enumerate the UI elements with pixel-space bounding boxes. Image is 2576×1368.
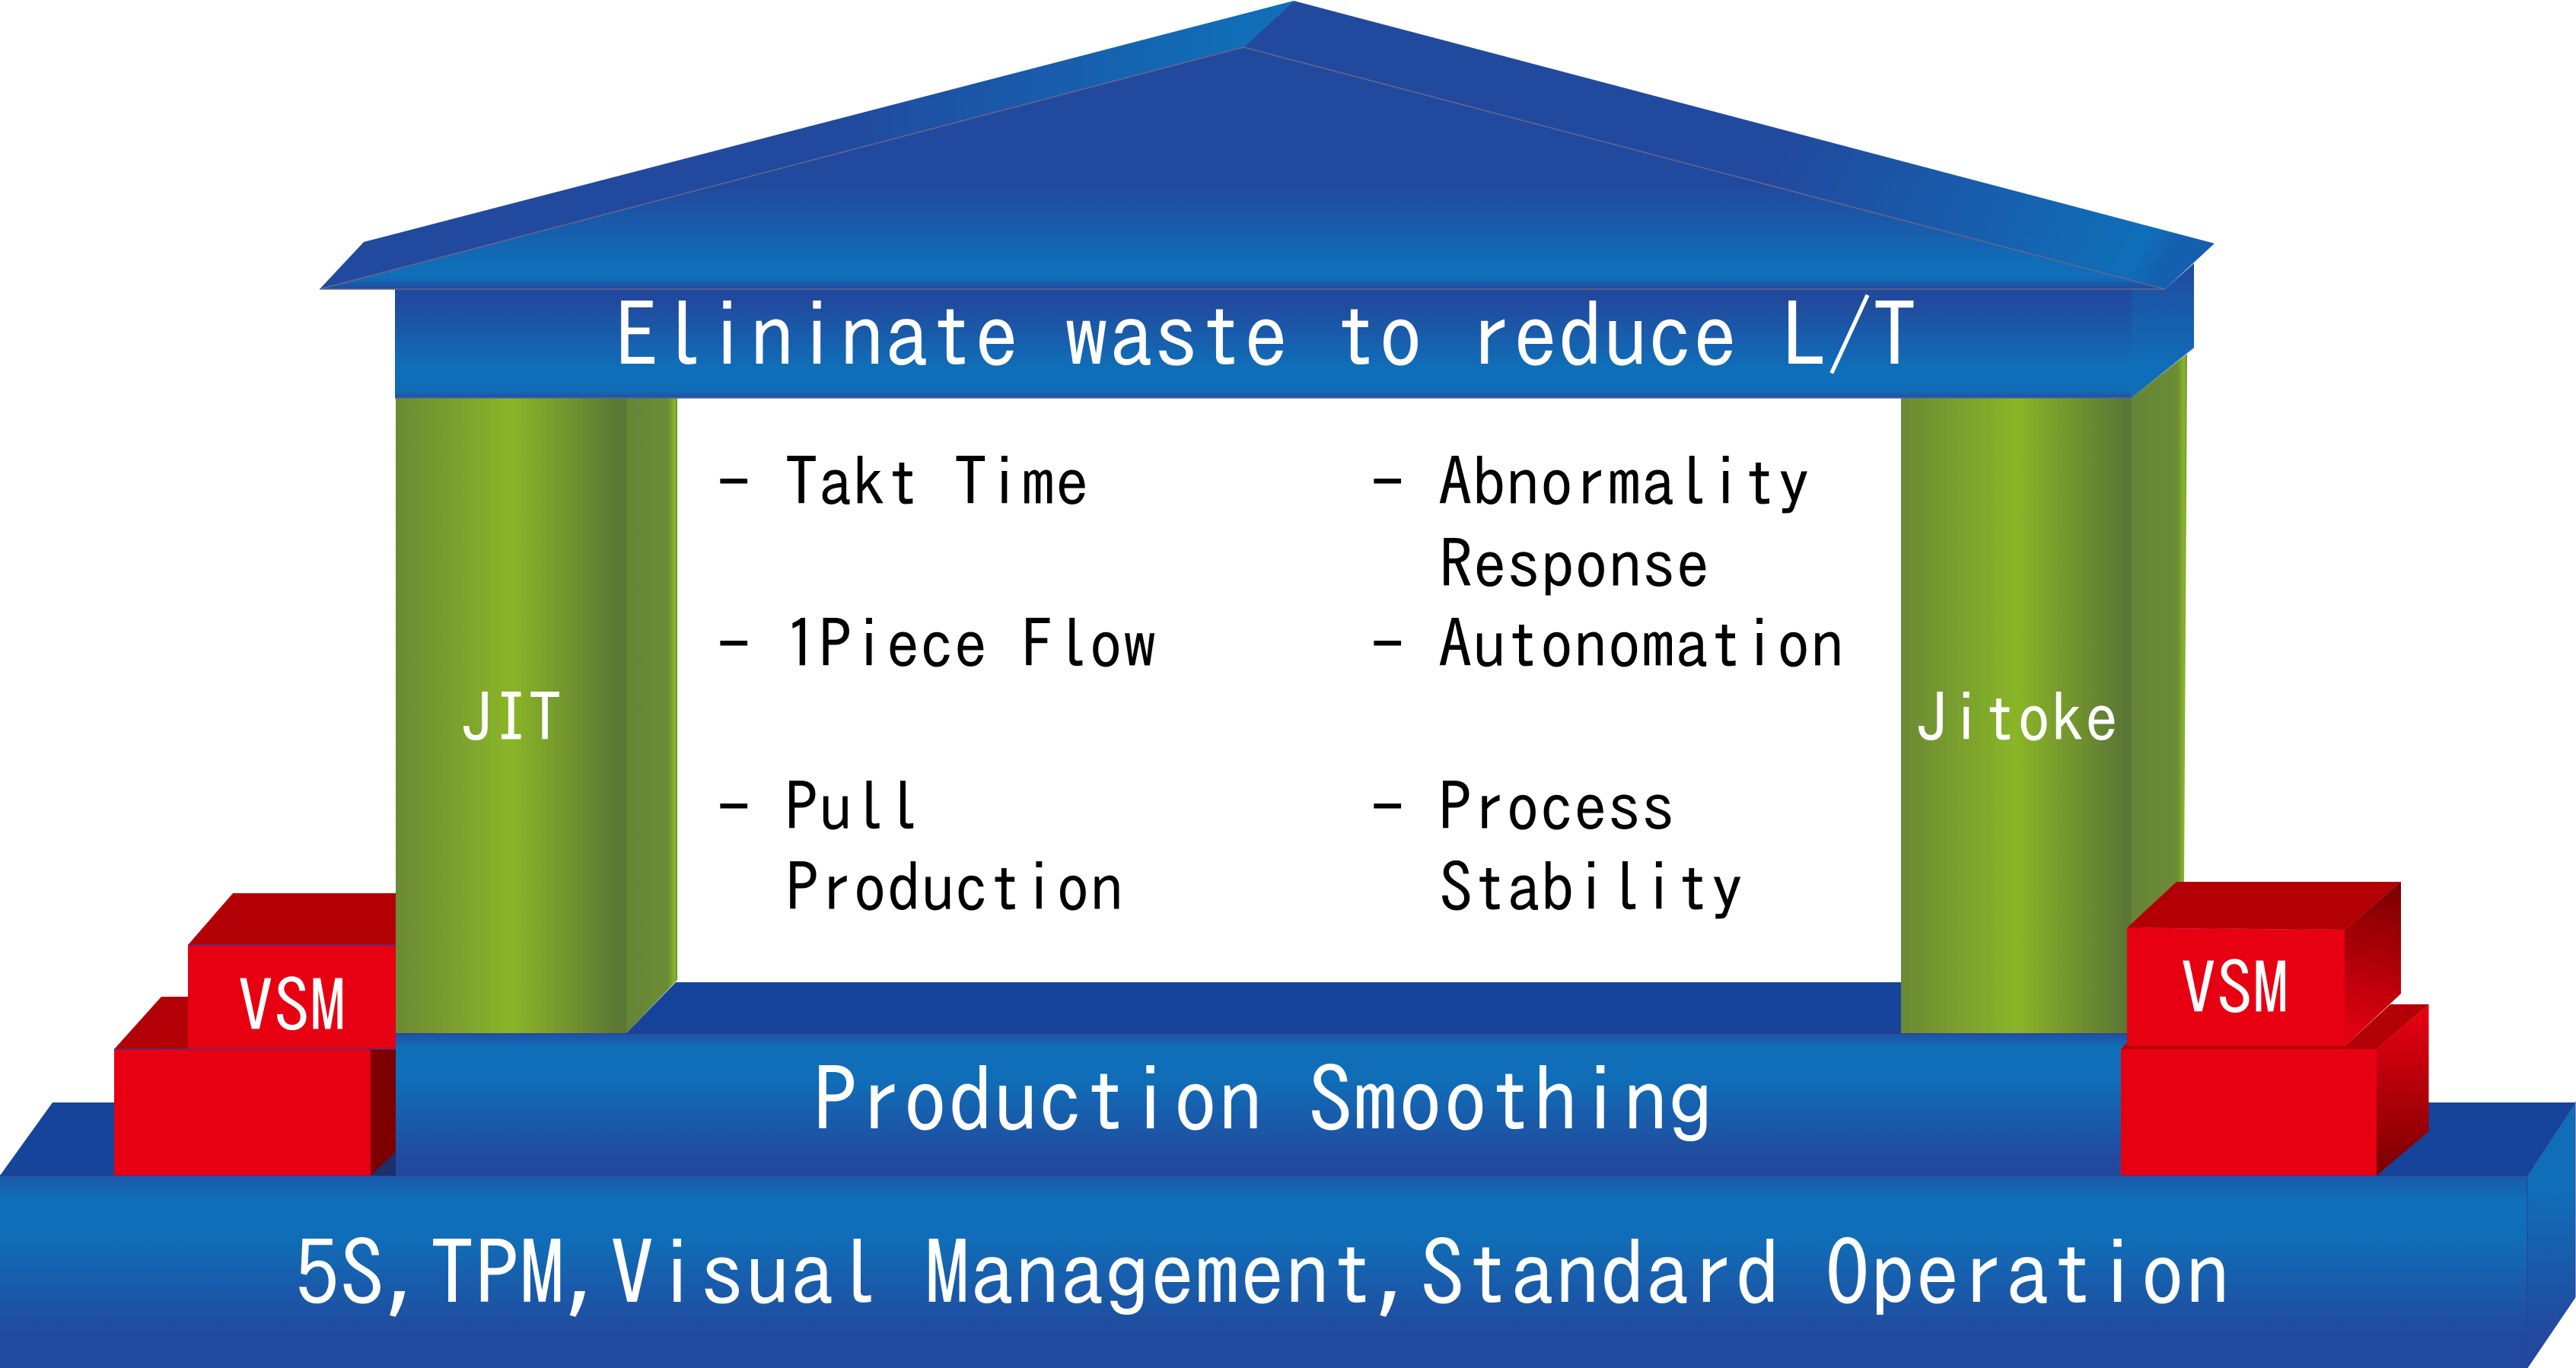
list: Jitoke items: - Process: [1371, 772, 1675, 840]
list: JIT items: - Takt Time: [717, 447, 1089, 515]
list: JIT items: Production: [785, 853, 1123, 921]
list: JIT items: - Pull: [717, 772, 920, 840]
second tier: Production Smoothing: [396, 982, 2127, 1176]
base platform: 5S, TPM, Visual Management, Standard Operation: [0, 1102, 2575, 1368]
tier label: Production Smoothing: [813, 1055, 1713, 1144]
JIT label: JIT: [460, 683, 562, 751]
roof: [320, 1, 2215, 289]
list: Jitoke items: Stability: [1439, 853, 1743, 921]
right VSM boxes: [2121, 882, 2429, 1176]
left VSM label: VSM: [237, 969, 345, 1042]
left pillar: JIT: [396, 398, 677, 1033]
right VSM label: VSM: [2180, 952, 2289, 1024]
list: Jitoke items: [1371, 447, 1844, 921]
list: Jitoke items: - Abnormality: [1371, 447, 1810, 515]
Jitoke label: Jitoke: [1915, 683, 2119, 751]
list: JIT items: [717, 447, 1157, 921]
base label: 5S,TPM,Visual Management,Standard Operation: [295, 1228, 2230, 1318]
list: Jitoke items: Response: [1439, 530, 1710, 597]
beam label: Elininate waste to reduce L/T: [615, 290, 1917, 380]
left VSM boxes: [114, 893, 396, 1176]
roof beam: Elininate waste to reduce L/T: [395, 263, 2194, 398]
right pillar: Jitoke: [1901, 354, 2187, 1033]
list: JIT items: - 1Piece Flow: [717, 609, 1157, 677]
list: Jitoke items: - Autonomation: [1371, 609, 1844, 677]
